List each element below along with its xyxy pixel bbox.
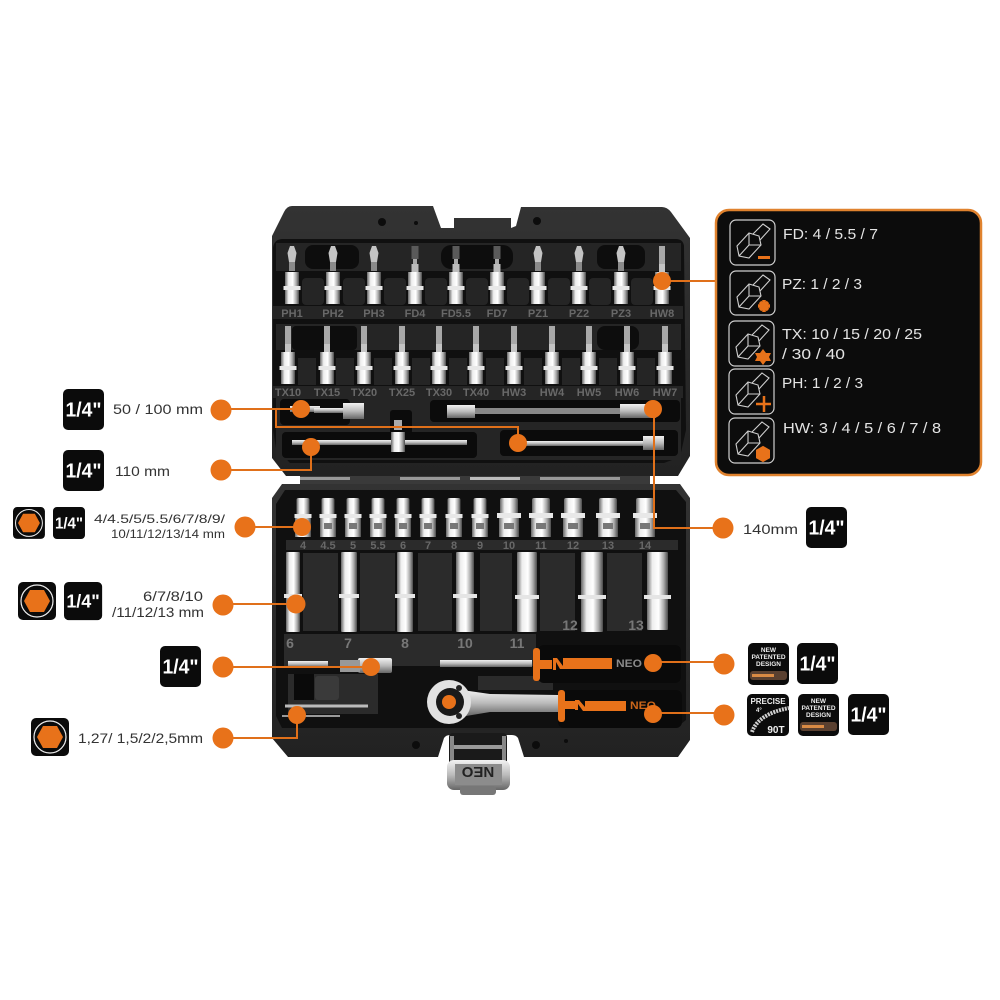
compact socket size labels: 4 (300, 540, 307, 552)
bit size labels: TX15 (314, 387, 340, 399)
right label: 140 mm (743, 507, 847, 548)
right label: new patented design driver: DESIGN (756, 661, 781, 668)
bit size labels: FD5.5 (441, 308, 471, 320)
left label: hex keys (31, 718, 203, 756)
bit size labels: HW7 (653, 387, 677, 399)
metal clasp: NEO (461, 763, 494, 780)
TX sizes: / 30 / 40 (782, 346, 845, 363)
compact socket size labels: 5 (350, 540, 356, 552)
deep socket size labels (286, 617, 644, 651)
callout dots on tools (286, 272, 671, 724)
ratchet with handle (427, 680, 682, 728)
left label: extensions 50/100 mm (63, 389, 203, 430)
left label: compact sockets: 10/11/12/13/14 mm (111, 527, 225, 541)
TX sizes (782, 326, 922, 363)
bit size labels (275, 308, 677, 399)
deep socket size labels: 13 (628, 617, 644, 633)
deep socket size labels: 8 (401, 635, 409, 651)
bit size labels: HW6 (615, 387, 639, 399)
left label: compact sockets: 4/4.5/5/5.5/6/7/8/9/ (94, 512, 226, 526)
panel: bit types (716, 210, 981, 475)
bit size labels: PZ1 (528, 308, 548, 320)
right label: new patented design driver: NEW (761, 647, 777, 654)
left label: hex keys: 1,27/ 1,5/2/2,5mm (78, 730, 203, 746)
left label: compact sockets (13, 507, 226, 541)
compact socket size labels (300, 540, 652, 552)
compact socket size labels: 10 (503, 540, 515, 552)
ratchet with handle: NEO (630, 700, 656, 712)
right label: ratchet features: PRECISE (750, 697, 786, 706)
icon: TX bit (729, 321, 774, 366)
right label: ratchet features: 4° (756, 708, 762, 714)
foam behind deep sockets (284, 540, 678, 714)
right label: new patented design driver (748, 643, 838, 685)
right label: new patented design driver: PATENTED (751, 654, 786, 661)
case hinges (300, 474, 650, 486)
bit size labels: FD7 (487, 308, 507, 320)
compact socket size labels: 14 (639, 540, 652, 552)
dark windows in foam (292, 245, 645, 350)
bit size labels: TX10 (275, 387, 301, 399)
screwdriver handle with bits driver: NEO (616, 658, 642, 670)
screwdriver handle with bits driver (440, 645, 681, 683)
foam blocks, bit rows (273, 243, 683, 460)
bit size labels: HW8 (650, 308, 674, 320)
left label: 110 mm (63, 450, 170, 491)
left label: universal joint (160, 646, 201, 687)
bit size labels: PH2 (322, 308, 344, 320)
bit size labels: TX25 (389, 387, 415, 399)
cut-outs for extensions (280, 399, 680, 458)
right label: ratchet features (747, 694, 889, 736)
HW sizes: HW: 3 / 4 / 5 / 6 / 7 / 8 (783, 420, 941, 437)
FD sizes: FD: 4 / 5.5 / 7 (783, 226, 878, 243)
compact socket size labels: 6 (400, 540, 406, 552)
case: top half with bit tray (272, 206, 690, 476)
icon: HW bit (729, 418, 774, 463)
TX sizes: TX: 10 / 15 / 20 / 25 (782, 326, 922, 343)
deep sockets row (284, 552, 671, 632)
compact socket size labels: 9 (477, 540, 483, 552)
PH sizes: PH: 1 / 2 / 3 (782, 375, 863, 392)
right label: 140 mm: 140mm (743, 521, 798, 537)
universal joint and adapter (288, 658, 392, 673)
left label: deep sockets (18, 582, 204, 620)
compact socket size labels: 12 (567, 540, 579, 552)
bit size labels: FD4 (405, 308, 426, 320)
callout lines (222, 281, 724, 738)
bit size labels: TX20 (351, 387, 377, 399)
icon: PZ bit (730, 271, 775, 315)
bit size labels: TX40 (463, 387, 489, 399)
left label: deep sockets: /11/12/13 mm (112, 604, 204, 620)
bit size labels: PZ3 (611, 308, 631, 320)
right label: ratchet features: PATENTED (801, 705, 836, 712)
hex keys (282, 674, 368, 716)
bit size labels: TX30 (426, 387, 452, 399)
bit size labels: PH1 (281, 308, 303, 320)
case: bottom half with sockets and ratchets (272, 484, 690, 795)
bit size labels: HW3 (502, 387, 526, 399)
left label: extensions 50/100 mm: 50 / 100 mm (113, 401, 203, 417)
deep socket size labels: 6 (286, 635, 294, 651)
compact socket size labels: 8 (451, 540, 457, 552)
right label: ratchet features: DESIGN (806, 712, 831, 719)
deep socket size labels: 12 (562, 617, 578, 633)
metal clasp (447, 733, 510, 795)
bit size labels: PH3 (363, 308, 385, 320)
compact socket size labels: 5.5 (370, 540, 386, 552)
compact socket size labels: 13 (602, 540, 614, 552)
deep socket size labels: 11 (510, 635, 525, 651)
extension bars and sliding T bar (290, 403, 664, 452)
compact sockets row (294, 498, 657, 537)
bit size labels: PZ2 (569, 308, 589, 320)
deep socket size labels: 7 (344, 635, 352, 651)
bit size labels: HW5 (577, 387, 601, 399)
icon: PH bit (729, 369, 774, 414)
bit size labels: HW4 (540, 387, 565, 399)
left label: 110 mm: 110 mm (115, 463, 170, 479)
icon: FD bit (730, 220, 775, 265)
compact socket size labels: 4.5 (320, 540, 336, 552)
bits row one (284, 246, 670, 304)
compact socket size labels: 7 (425, 540, 431, 552)
callout dots on labels (210, 400, 734, 748)
bits row two (280, 326, 674, 384)
right label: ratchet features: NEW (811, 698, 827, 705)
compact socket size labels: 11 (535, 540, 547, 552)
right label: ratchet features: 90T (767, 725, 785, 736)
left label: deep sockets: 6/7/8/10 (143, 588, 203, 604)
PZ sizes: PZ: 1 / 2 / 3 (782, 276, 862, 293)
deep socket size labels: 10 (457, 635, 473, 651)
